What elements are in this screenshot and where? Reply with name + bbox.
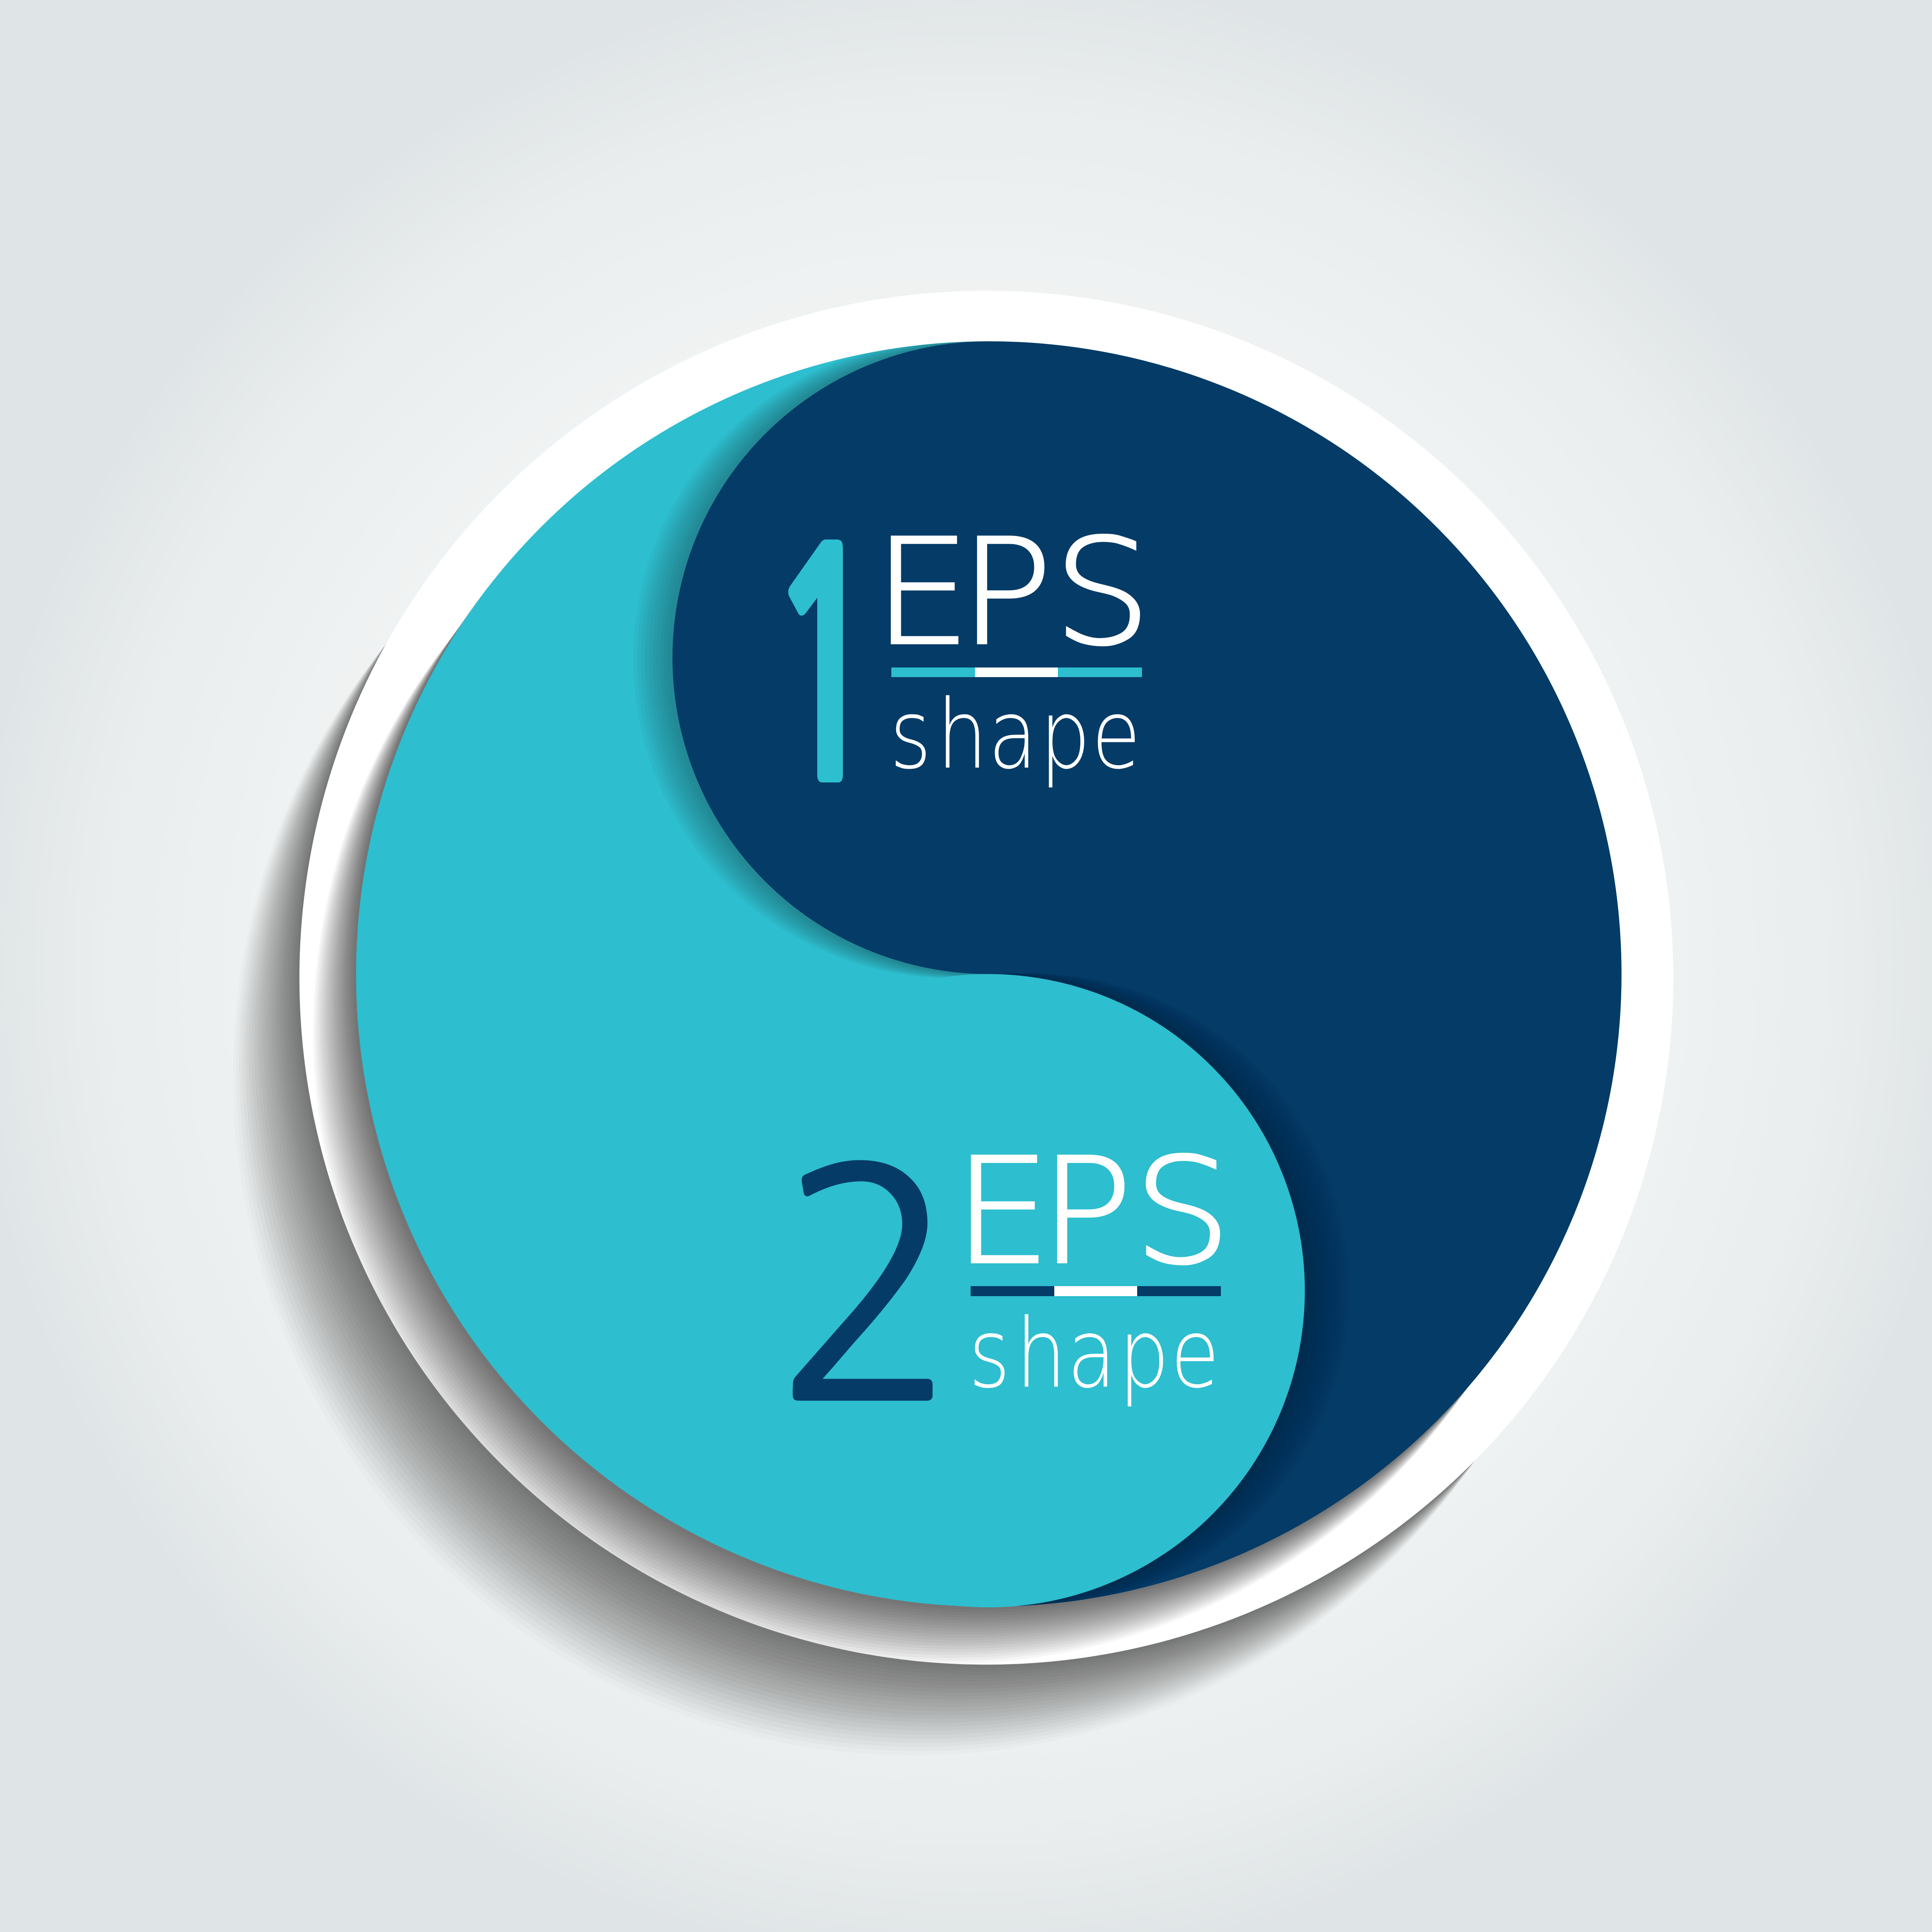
- divider bar 1: [891, 667, 1142, 677]
- numeral 1: 1: [764, 517, 887, 825]
- heading EPS 1: EPS: [873, 508, 1151, 678]
- label shape 2: shape: [969, 1298, 1220, 1409]
- navy segment: [672, 341, 1622, 1607]
- shadow of navy lobe on teal: [633, 340, 1301, 978]
- white outer disc: [300, 291, 1673, 1665]
- heading EPS 2: EPS: [953, 1127, 1231, 1297]
- shadow of teal lobe on navy: [675, 973, 1349, 1607]
- inner drop shadow on white disc: [313, 344, 1619, 1664]
- outer drop shadow: [233, 296, 1670, 1755]
- circle diagram: [233, 291, 1673, 1755]
- divider bar 2: [971, 1286, 1221, 1296]
- teal segment base: [356, 341, 1622, 1607]
- block 1: [764, 508, 1151, 825]
- numeral 2: 2: [775, 1128, 960, 1444]
- block 2: [775, 1127, 1231, 1444]
- label shape 1: shape: [890, 679, 1141, 790]
- teal lobe: [671, 974, 1305, 1607]
